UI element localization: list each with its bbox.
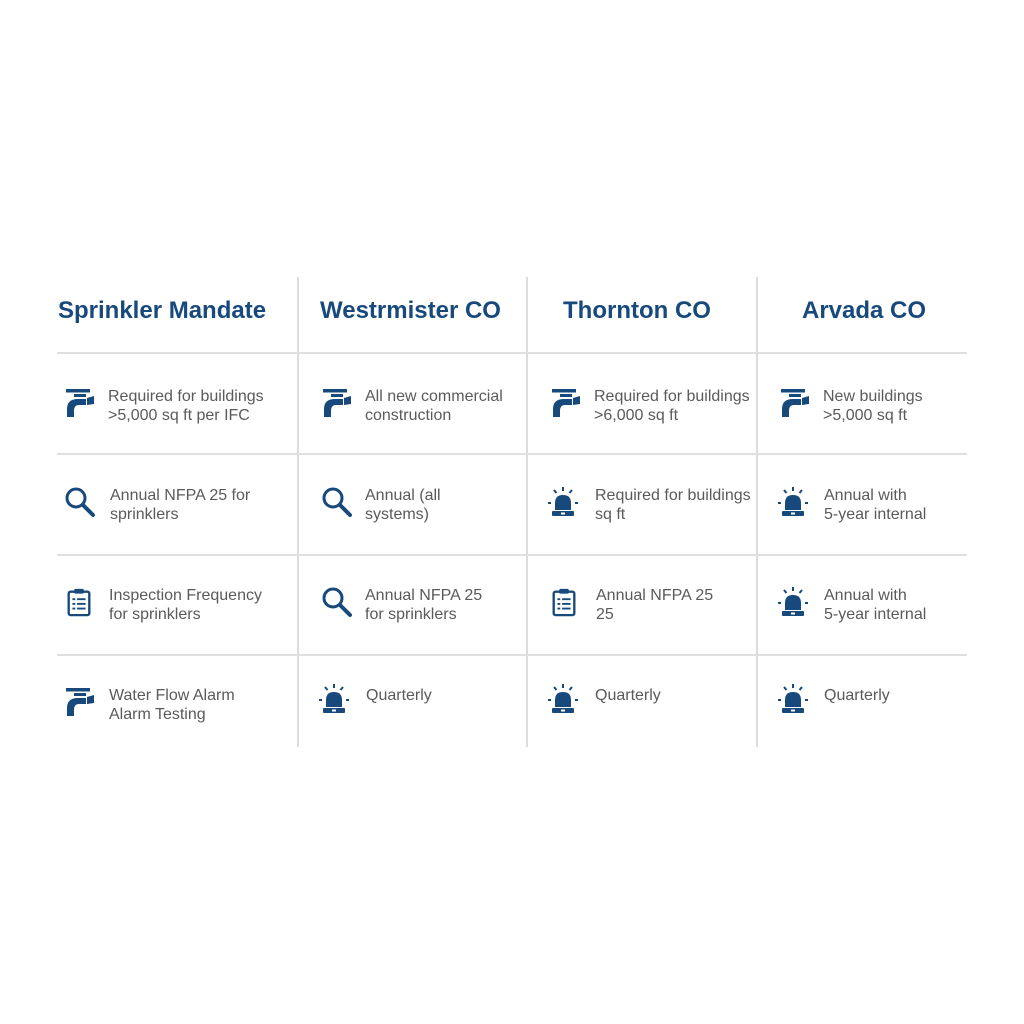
row 2 cell 3: sq ft	[595, 506, 625, 523]
row 4 cell 1	[66, 687, 235, 723]
row 1 cell 2: construction	[365, 407, 451, 424]
row 3 cell 2	[322, 587, 482, 623]
row 1 cell 3: >6,000 sq ft	[594, 407, 678, 424]
row 1 cell 2: All new commercial	[365, 388, 503, 405]
row 1 cell 4: >5,000 sq ft	[823, 407, 907, 424]
row 3 cell 4: 5-year internal	[824, 606, 926, 623]
row 2 cell 3: Required for buildings	[595, 487, 751, 504]
row 3 cell 2: for sprinklers	[365, 606, 457, 623]
row 4 cell 3	[548, 684, 661, 713]
row 2 cell 2: systems)	[365, 506, 429, 523]
row 2 cell 2	[322, 487, 441, 523]
row 3 cell 4	[778, 587, 926, 623]
row 2 cell 1: Annual NFPA 25 for	[110, 487, 250, 504]
row 2 cell 1	[66, 487, 250, 523]
row 3 cell 3	[552, 587, 713, 623]
row 1 cell 1: >5,000 sq ft per IFC	[108, 407, 250, 424]
row 2 cell 4: Annual with	[824, 487, 907, 504]
row 1 cell 4: New buildings	[823, 388, 923, 405]
row 2 cell 4	[778, 487, 926, 523]
row 3 cell 4: Annual with	[824, 587, 907, 604]
row 1 cell 2	[323, 388, 503, 424]
heading: Arvada CO: Arvada CO	[802, 297, 926, 324]
row 1 cell 3: Required for buildings	[594, 388, 750, 405]
heading: Westrmister CO: Westrmister CO	[320, 297, 501, 324]
row 3 cell 2: Annual NFPA 25	[365, 587, 482, 604]
row 4 cell 3: Quarterly	[595, 687, 661, 704]
row 1 cell 3	[552, 388, 750, 424]
row 4 cell 2	[319, 684, 432, 713]
row 4 cell 4	[778, 684, 890, 713]
row 1 cell 4	[781, 388, 923, 424]
row 2 cell 4: 5-year internal	[824, 506, 926, 523]
row 3 cell 3: Annual NFPA 25	[596, 587, 713, 604]
row 2 cell 3	[548, 487, 751, 523]
row 2 cell 2: Annual (all	[365, 487, 441, 504]
row 3 cell 1	[68, 587, 262, 623]
row 4 cell 1: Water Flow Alarm	[109, 687, 235, 704]
row 1 cell 1	[66, 388, 264, 424]
row 1 cell 1: Required for buildings	[108, 388, 264, 405]
row 4 cell 4: Quarterly	[824, 687, 890, 704]
row 4 cell 1: Alarm Testing	[109, 706, 206, 723]
heading: Sprinkler Mandate: Sprinkler Mandate	[58, 297, 266, 324]
row 3 cell 1: Inspection Frequency	[109, 587, 262, 604]
row 3 cell 3: 25	[596, 606, 614, 623]
row 3 cell 1: for sprinklers	[109, 606, 201, 623]
heading: Thornton CO: Thornton CO	[563, 297, 711, 324]
row 2 cell 1: sprinklers	[110, 506, 178, 523]
row 4 cell 2: Quarterly	[366, 687, 432, 704]
